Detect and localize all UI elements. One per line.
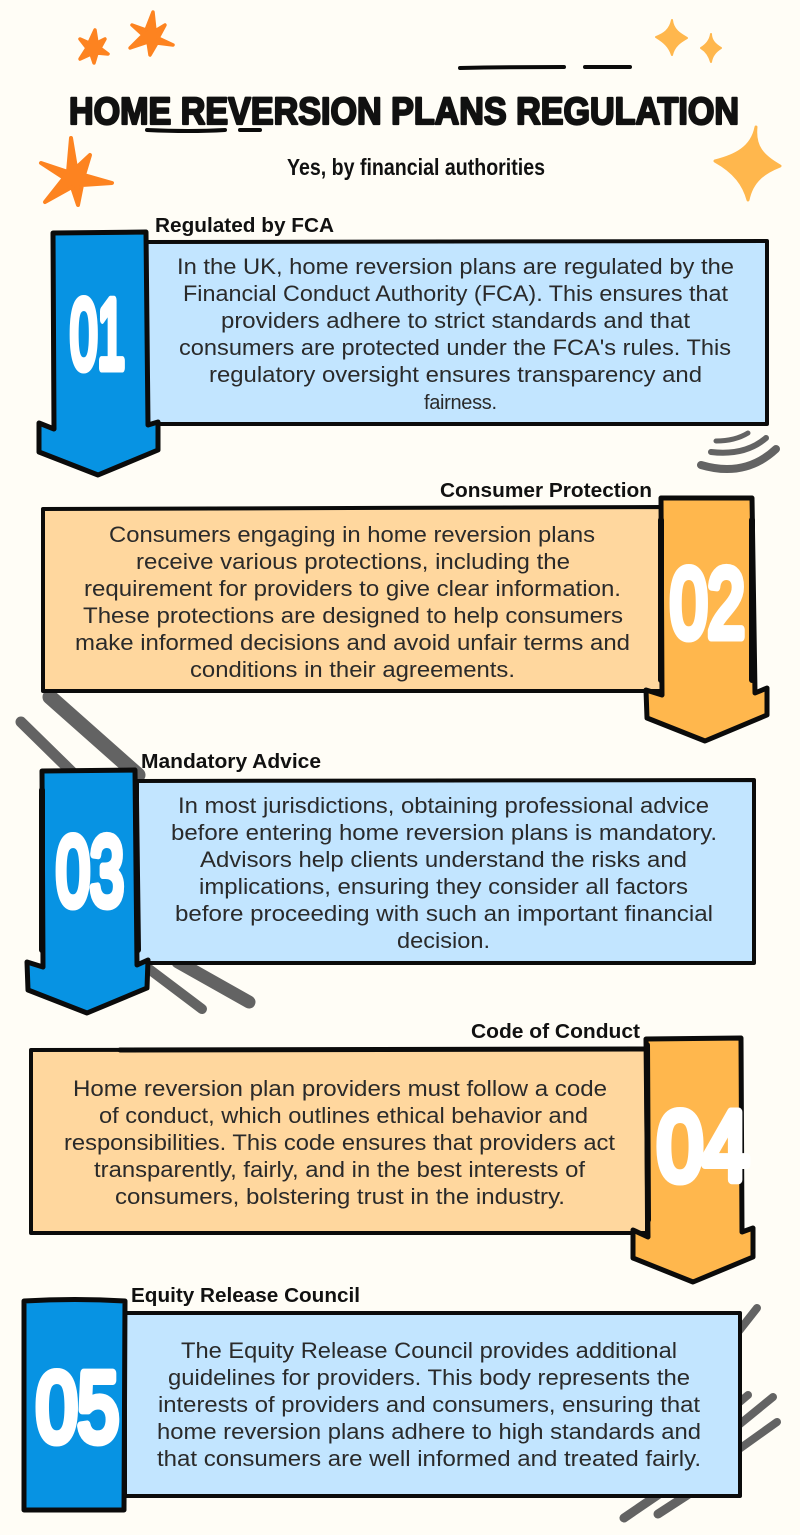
icon: yellow sparkle smallest [701,34,721,62]
body text: Consumers engaging in home reversion plans [109,522,595,547]
body text: interests of providers and consumers, ensuring that [158,1392,700,1417]
text box [31,1049,647,1233]
arrow [646,498,767,741]
number: 02 [670,548,745,658]
body text: In the UK, home reversion plans are regulated by the [177,254,734,279]
body text: decision. [397,928,490,953]
body text: home reversion plans adhere to high standards and [157,1419,701,1444]
number: 05 [36,1352,119,1462]
title underline [147,130,260,131]
body text [75,522,630,682]
number: 04 [657,1091,749,1201]
heading: Equity Release Council [131,1285,360,1307]
body text: Home reversion plan providers must follow a code [73,1076,607,1101]
panel: step 5 Equity Release Council [24,1285,740,1510]
text box [137,780,754,963]
icon: large orange star [41,138,112,205]
body text: providers adhere to strict standards and that [221,308,690,333]
body text [64,1076,615,1209]
body text: guidelines for providers. This body represents the [168,1365,690,1390]
heading: Code of Conduct [471,1021,640,1043]
text box [125,1313,740,1496]
body text [177,254,734,414]
body text: regulatory oversight ensures transparency and [209,362,702,387]
arrow [633,1038,753,1282]
panel: step 2 Consumer Protection [43,480,767,741]
panel: step 4 Code of Conduct [31,1021,753,1282]
number: 01 [70,279,125,389]
arrow [27,770,148,1013]
body text [157,1338,701,1471]
icon: medium orange star [130,12,173,55]
body text: conditions in their agreements. [190,657,515,682]
arrow [39,232,158,475]
body text: consumers are protected under the FCA's rules. This [179,335,731,360]
heading: Regulated by FCA [155,215,334,237]
title: HOME REVERSION PLANS REGULATION [69,91,739,133]
body text: fairness. [424,392,497,414]
decoration: grey diagonal strokes behind step 5 [624,1308,777,1518]
body text: consumers, bolstering trust in the industry. [115,1184,565,1209]
body text [171,793,717,953]
body text: These protections are designed to help consumers [83,603,623,628]
body text: The Equity Release Council provides additional [181,1338,677,1363]
decorative title marks [460,67,630,68]
body text: Financial Conduct Authority (FCA). This ensures that [183,281,728,306]
heading: Consumer Protection [440,480,652,502]
heading: Mandatory Advice [141,751,321,773]
body text: of conduct, which outlines ethical behavior and [99,1103,588,1128]
icon: small orange star [80,30,108,63]
body text: that consumers are well informed and treated fairly. [157,1446,701,1471]
panel: step 1 Regulated by FCA [39,215,767,475]
subtitle: Yes, by financial authorities [287,154,545,180]
decoration: grey diagonal strokes behind step 3 [21,697,249,1009]
number: 03 [56,816,124,926]
decoration: grey curved strokes [701,433,776,469]
body text: before entering home reversion plans is mandatory. [171,820,717,845]
body text: Advisors help clients understand the risks and [200,847,687,872]
number block [24,1300,125,1510]
body text: make informed decisions and avoid unfair terms and [75,630,630,655]
body text: receive various protections, including the [136,549,570,574]
panel: step 3 Mandatory Advice [27,751,754,1013]
text box [43,507,662,691]
body text: transparently, fairly, and in the best interests of [94,1157,586,1182]
body text: requirement for providers to give clear information. [84,576,621,601]
body text: In most jurisdictions, obtaining professional advice [178,793,709,818]
text box [146,241,767,424]
body text: responsibilities. This code ensures that providers act [64,1130,615,1155]
body text: before proceeding with such an important financial [175,901,713,926]
icon: yellow sparkle large [715,127,780,200]
icon: yellow sparkle small left [656,20,687,55]
body text: implications, ensuring they consider all factors [199,874,688,899]
